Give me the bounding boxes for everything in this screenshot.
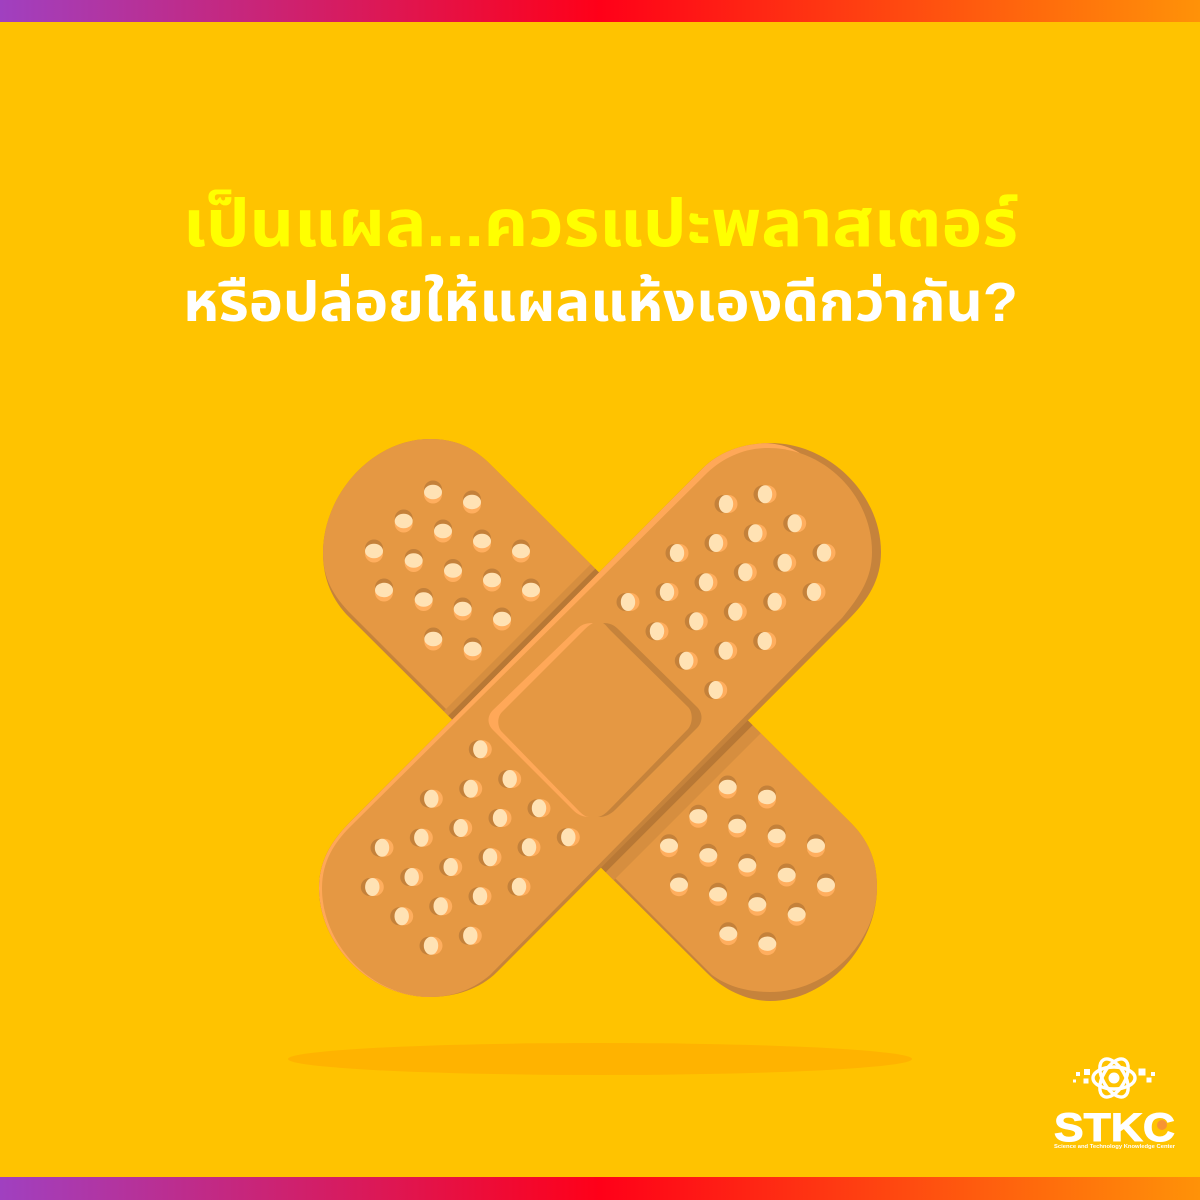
centre pad shadow edge: [598, 623, 702, 817]
logo wordmark: STKC: [1054, 1106, 1175, 1150]
STKC logo: [1054, 1054, 1176, 1150]
centre pad highlight edge: [488, 623, 593, 817]
icon: pixel squares: [1073, 1068, 1155, 1084]
icon: atom mark: [1093, 1054, 1135, 1102]
top gradient bar: [0, 0, 1200, 22]
logo tagline: Science and Technology Knowledge Center: [1054, 1144, 1176, 1150]
bandage: under strip, top-left to bottom-right: [323, 439, 877, 1001]
bandage: top strip, bottom-left to top-right: [319, 443, 881, 997]
ground shadow ellipse: [288, 1043, 912, 1075]
logo orange dot: [1157, 1120, 1167, 1130]
bottom gradient bar: [0, 1177, 1200, 1200]
subtitle: white headline: หรือปล่อยให้แผลแห้งเองดีกว่ากัน?: [183, 271, 1018, 333]
title: yellow headline: เป็นแผล...ควรแปะพลาสเตอร์: [183, 186, 1018, 260]
